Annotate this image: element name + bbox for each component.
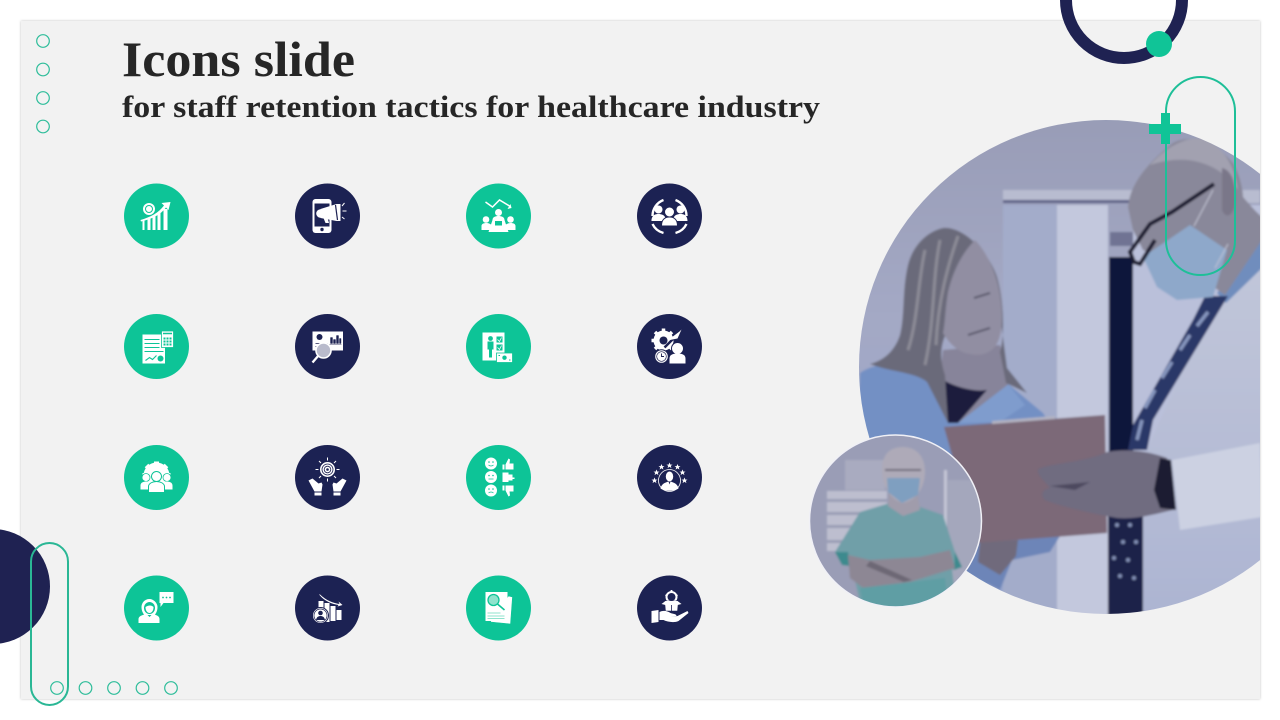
icon: documents with magnifier bbox=[466, 576, 531, 640]
doctor bbox=[1143, 522, 1260, 611]
icon: presentation board with magnifier bbox=[295, 314, 360, 379]
clipboard bbox=[944, 415, 1107, 543]
icon: target held by two hands bbox=[295, 445, 360, 510]
decorative dots row bottom bbox=[51, 682, 177, 694]
decorative navy ring top right bbox=[1066, 0, 1182, 58]
title: Icons slide bbox=[122, 31, 355, 87]
icon: support agent with chat bubble bbox=[124, 576, 189, 640]
icon: smartphone with megaphone bbox=[295, 184, 360, 248]
icon: declining bar chart with employee bbox=[295, 576, 360, 640]
decorative navy circle bottom left bbox=[0, 529, 50, 644]
decorative dots column top left bbox=[37, 35, 49, 133]
subtitle: for staff retention tactics for healthcare industry bbox=[122, 89, 821, 124]
doctor hand and watch bbox=[1038, 450, 1173, 518]
icon: team with circular arrows bbox=[637, 184, 702, 248]
icon: document with calculator bbox=[124, 314, 189, 379]
icon: rating faces with thumbs bbox=[466, 445, 531, 510]
icon: gear, clock and person bbox=[637, 314, 702, 379]
icon: employee surrounded by stars bbox=[637, 445, 702, 510]
icon: employee board with money bbox=[466, 314, 531, 379]
nurse bbox=[860, 365, 1046, 584]
green plus sign bbox=[1149, 113, 1181, 144]
decorative green dot on ring bbox=[1146, 31, 1172, 57]
icon: hand holding box with gear bbox=[637, 576, 702, 640]
large circular photo: doctor and nurse bbox=[850, 110, 1270, 625]
icon: growth chart with target bbox=[124, 184, 189, 248]
green pill outline top right bbox=[1166, 77, 1235, 275]
icon: gear with team bbox=[124, 445, 189, 510]
icon: meeting table with trend line bbox=[466, 184, 531, 248]
small circular photo: surgeon with arms crossed bbox=[805, 432, 985, 612]
green pill outline bottom left bbox=[31, 543, 68, 705]
